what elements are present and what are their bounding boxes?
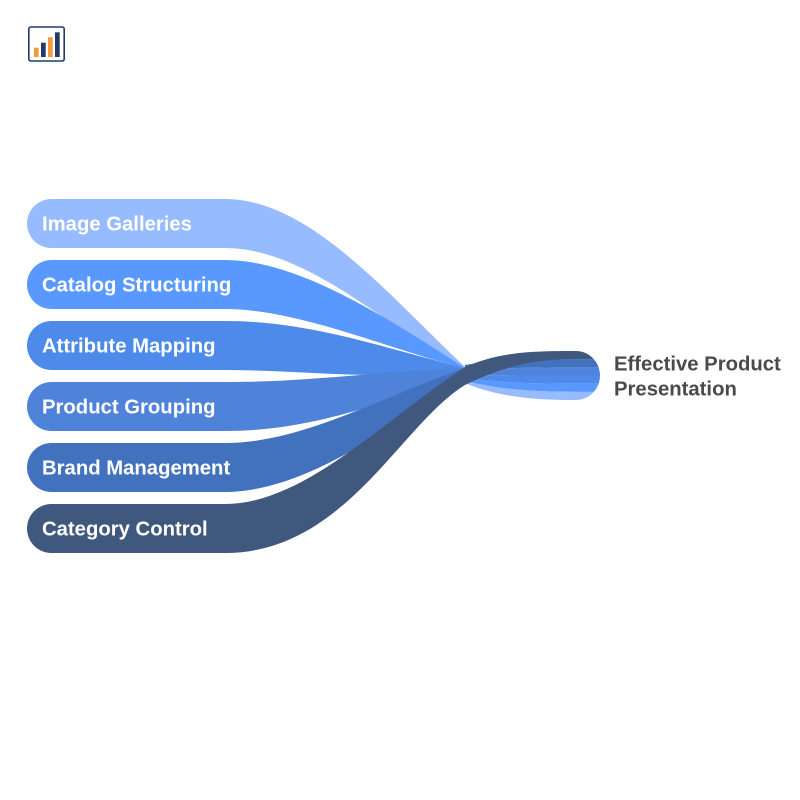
- label: Catalog Structuring: Catalog Structuring: [42, 274, 231, 296]
- ribbon: Attribute Mapping: [27, 321, 600, 384]
- label: Category Control: Category Control: [42, 518, 208, 540]
- outcome label: Effective Product Presentation: Presentation: [614, 378, 737, 400]
- label: Attribute Mapping: Attribute Mapping: [42, 336, 216, 358]
- label: Image Galleries: Image Galleries: [42, 214, 192, 236]
- icon: bar chart logo: [29, 27, 64, 61]
- label: Brand Management: Brand Management: [42, 458, 230, 480]
- ribbon: Product Grouping: [27, 367, 600, 431]
- label: Product Grouping: Product Grouping: [42, 396, 216, 418]
- ribbon: Brand Management: [27, 359, 599, 492]
- outcome label: Effective Product Presentation: [614, 354, 781, 400]
- ribbon: Catalog Structuring: [27, 260, 599, 392]
- ribbon: Image Galleries: [27, 199, 594, 400]
- ribbon: Category Control: [27, 351, 594, 553]
- outcome label: Effective Product Presentation: Effective Product: [614, 354, 781, 376]
